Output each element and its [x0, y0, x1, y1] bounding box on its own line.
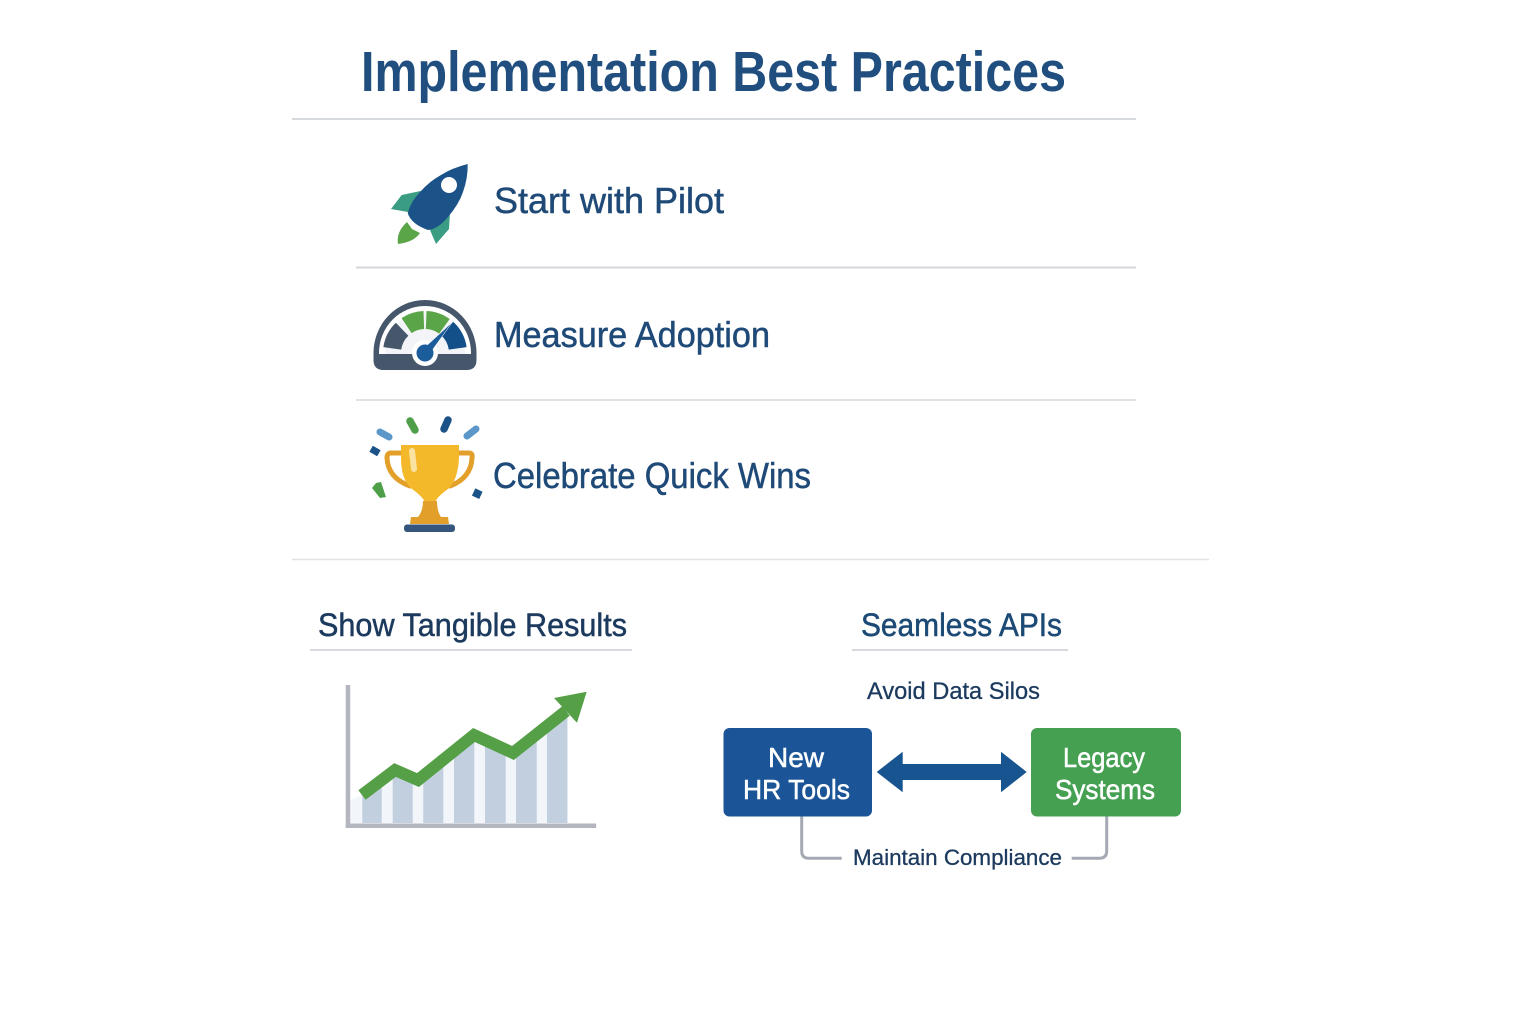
- item: Measure Adoption: Measure Adoption: [494, 314, 770, 355]
- box: Legacy Systems: Systems: [1055, 774, 1155, 805]
- box: Legacy Systems: [1031, 728, 1181, 816]
- icon: rocket: [391, 164, 468, 244]
- title: Implementation Best Practices: [361, 40, 1066, 104]
- arrow: two-way link: [877, 752, 1027, 792]
- item: Start with Pilot: Start with Pilot: [494, 180, 724, 221]
- heading: Seamless APIs: Seamless APIs: [861, 607, 1062, 643]
- icon: trophy with confetti: [369, 420, 483, 532]
- box: New HR Tools: HR Tools: [743, 774, 850, 805]
- box: Legacy Systems: Legacy: [1063, 742, 1145, 773]
- heading: Show Tangible Results: Show Tangible Results: [318, 607, 627, 643]
- item: Celebrate Quick Wins: Celebrate Quick Wins: [493, 455, 811, 496]
- icon: gauge: [374, 300, 476, 370]
- label: Maintain Compliance: Maintain Compliance: [853, 845, 1062, 870]
- box: New HR Tools: New: [768, 742, 825, 773]
- connector: compliance bracket: [802, 816, 1107, 858]
- chart: rising bars with arrow: [346, 685, 596, 828]
- label: Avoid Data Silos: Avoid Data Silos: [867, 678, 1040, 705]
- box: New HR Tools: [724, 728, 872, 816]
